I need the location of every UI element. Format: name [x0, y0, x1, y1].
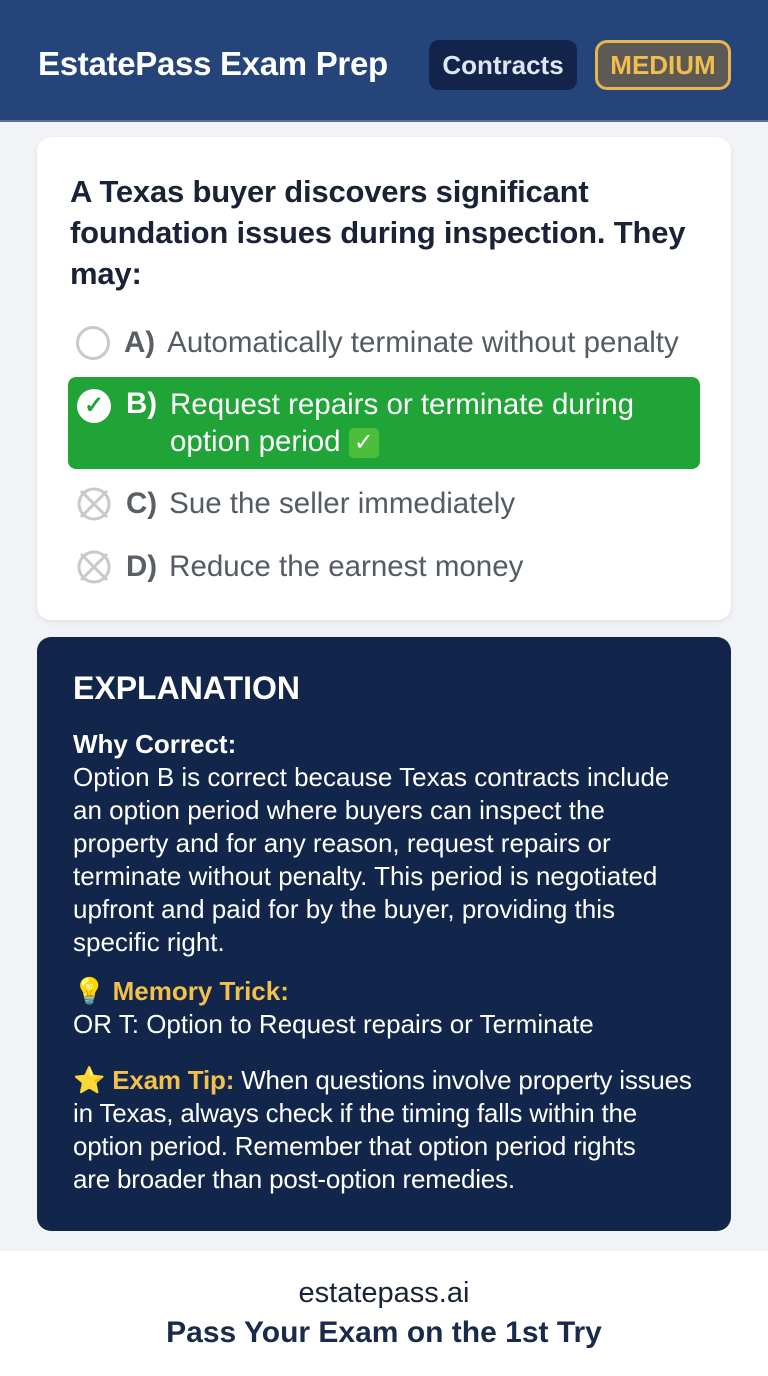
header bar [0, 0, 768, 122]
option C: C) [126, 487, 157, 520]
exam tip: option period. Remember that option period rights [73, 1131, 636, 1161]
option B correct: B) [126, 387, 157, 420]
option D: D) [126, 550, 157, 583]
option B correct: Request repairs or terminate during [170, 388, 634, 421]
memory trick: 💡 Memory Trick: [73, 976, 289, 1006]
option D: Reduce the earnest money [169, 550, 523, 583]
exam tip: ⭐ Exam Tip: When questions involve property issues [73, 1065, 692, 1095]
exam tip [73, 1065, 692, 1194]
panel: question card [37, 137, 731, 620]
option B correct: option period [170, 425, 341, 458]
option C: Sue the seller immediately [169, 487, 515, 520]
memory trick [73, 976, 594, 1039]
badge: contracts [429, 40, 577, 90]
option B correct [68, 377, 700, 469]
why correct: Option B is correct because Texas contracts include an option period where buyers can inspect the property and for any reason, request repairs or terminate without penalty. This period is negotiated upfront and paid for by the buyer, providing this specific right. [73, 762, 669, 957]
heading: EXPLANATION [73, 670, 300, 706]
panel: explanation [37, 637, 731, 1231]
footer tagline: Pass Your Exam on the 1st Try [166, 1316, 602, 1349]
option A: A) [124, 326, 155, 359]
option B correct: ✓ [354, 429, 374, 456]
exam tip: are broader than post-option remedies. [73, 1164, 515, 1194]
badge: medium [595, 40, 731, 90]
memory trick: OR T: Option to Request repairs or Terminate [73, 1009, 594, 1039]
exam tip: in Texas, always check if the timing falls within the [73, 1098, 637, 1128]
title: EstatePass Exam Prep [38, 45, 388, 82]
why correct: Why Correct: [73, 729, 236, 759]
footer [0, 1251, 768, 1376]
icon: check: ✓ [84, 392, 104, 419]
question text: A Texas buyer discovers significant foundation issues during inspection. They may: [70, 174, 685, 291]
badge: medium: MEDIUM [610, 50, 716, 80]
footer url: estatepass.ai [299, 1277, 469, 1309]
badge: contracts: Contracts [442, 50, 564, 80]
option A: Automatically terminate without penalty [167, 326, 679, 359]
icon: check [77, 389, 111, 423]
